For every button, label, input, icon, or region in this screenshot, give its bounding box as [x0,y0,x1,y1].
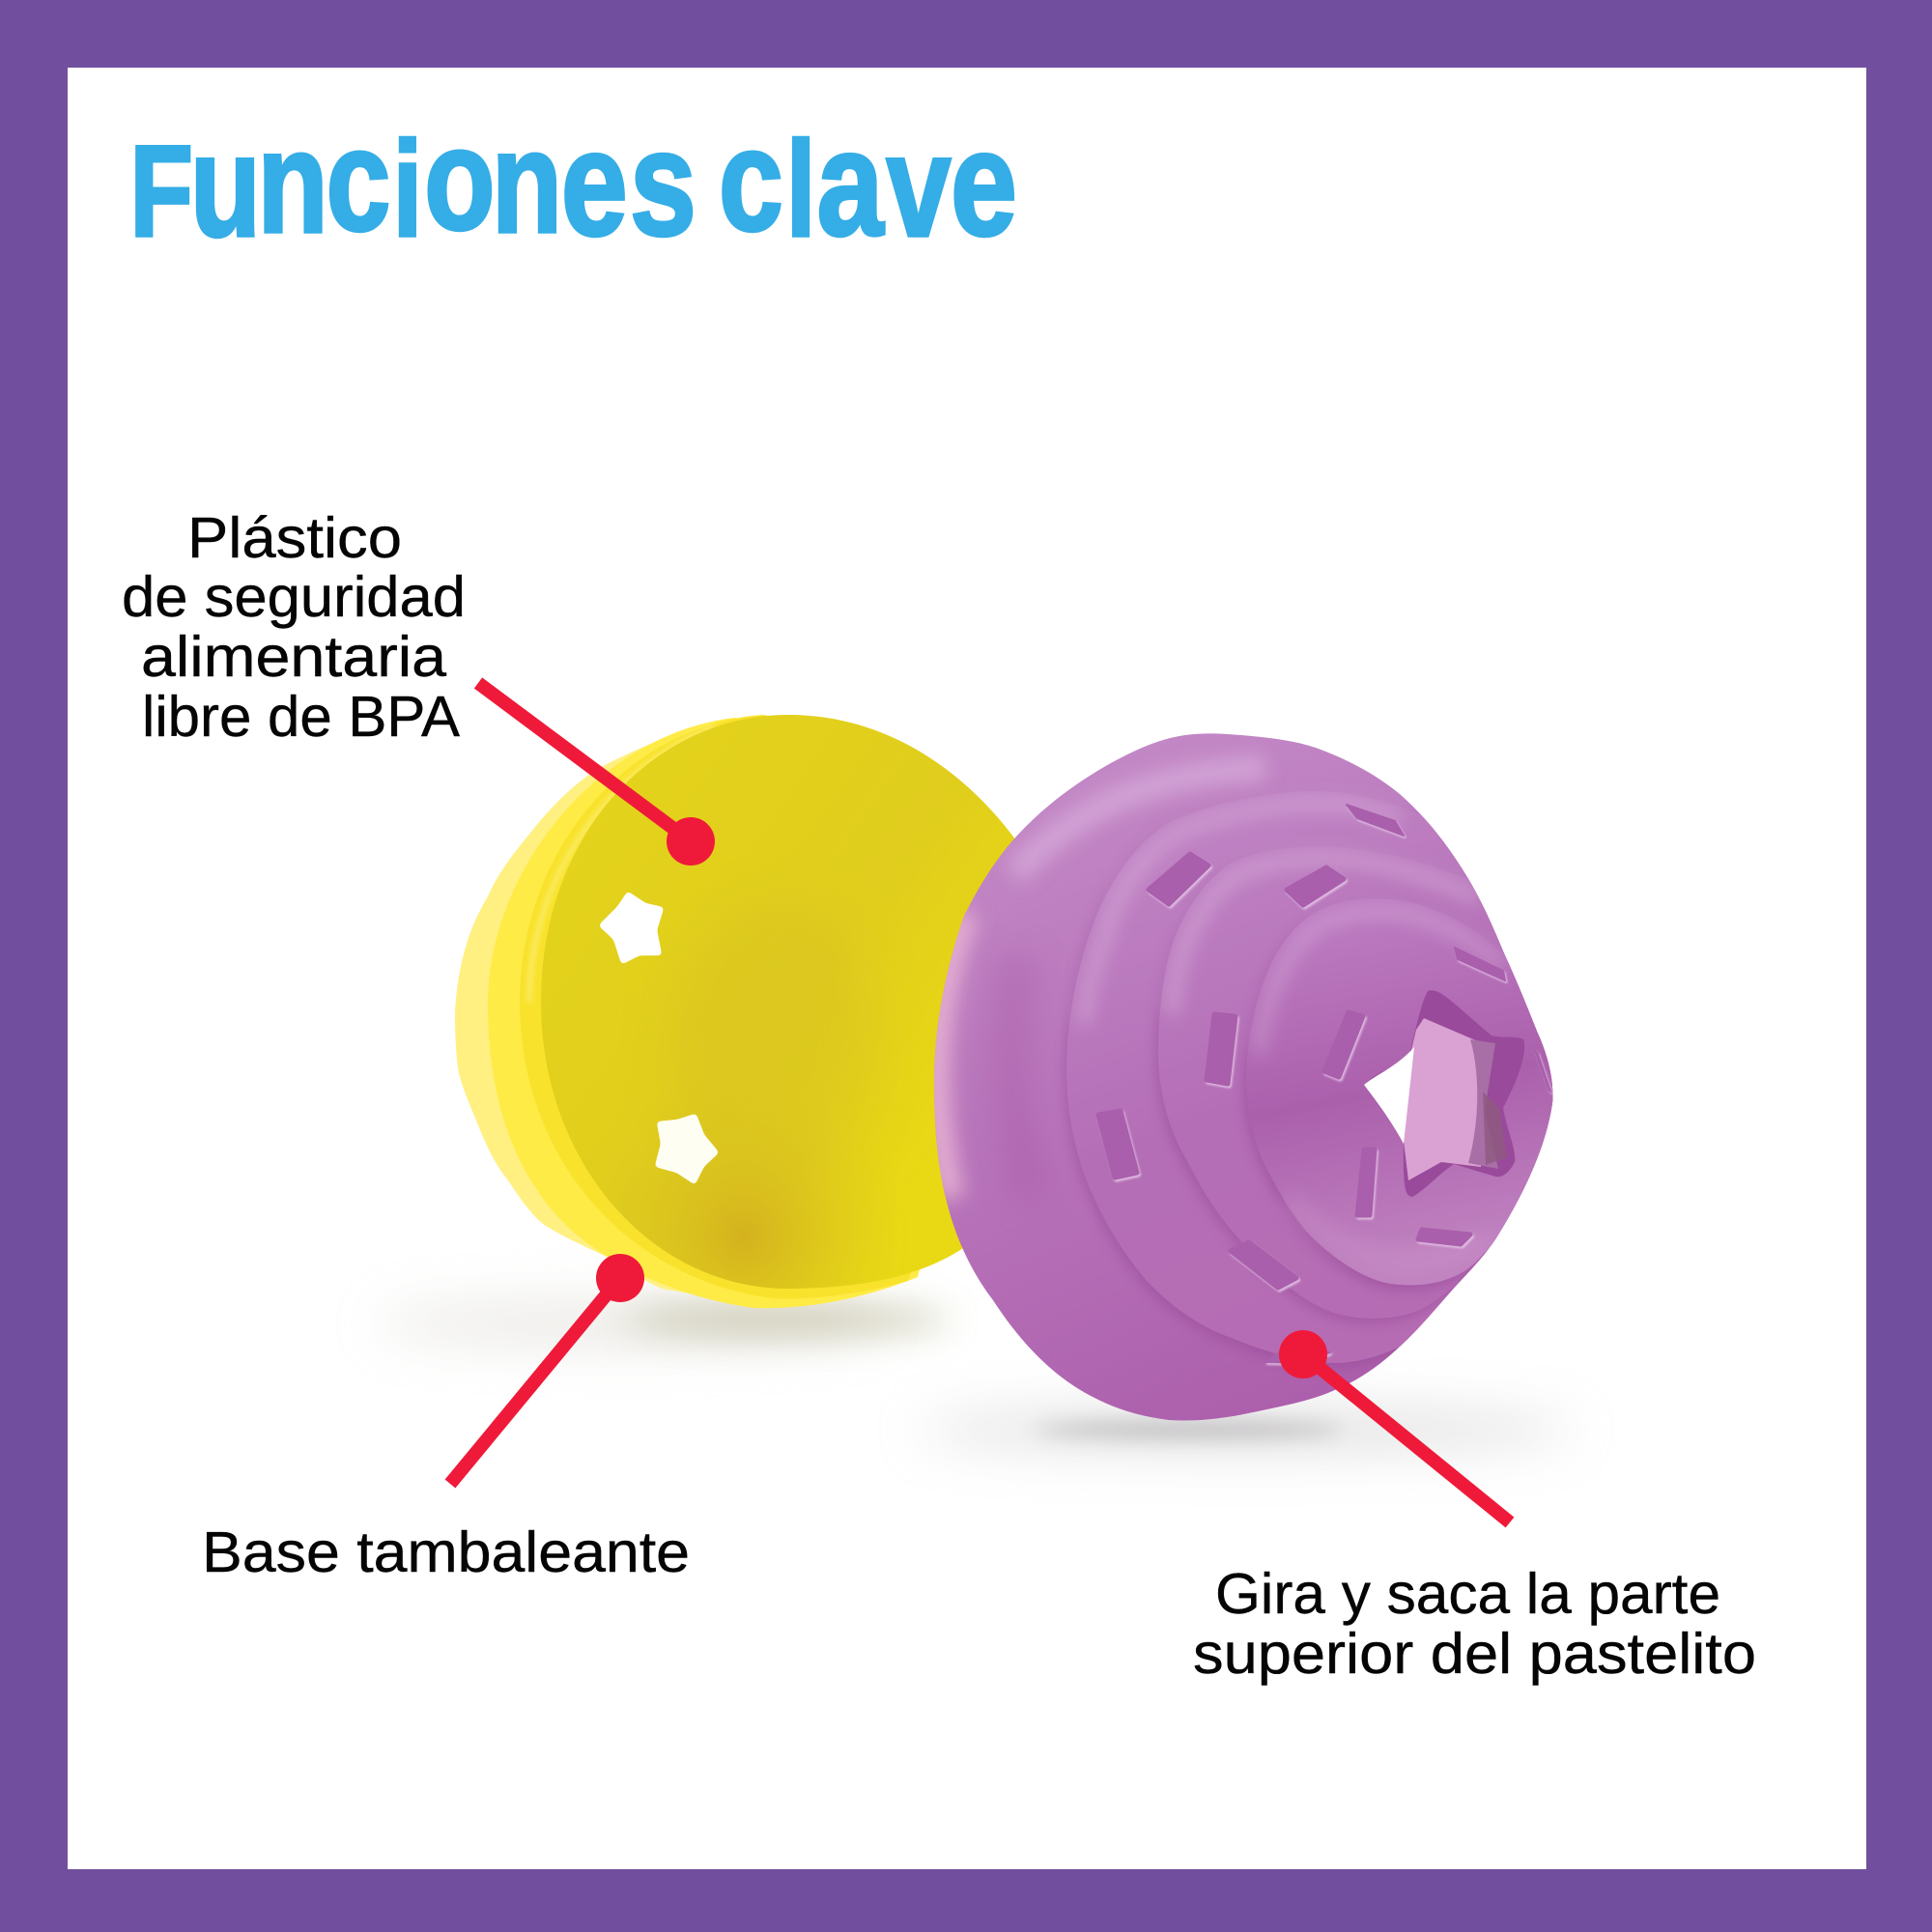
floor shadows [377,1304,1575,1451]
title: c [719,99,783,261]
dark star rim [1364,990,1524,1197]
title: a [817,99,884,267]
label text: superior del pastelito [1193,1622,1756,1686]
disc shading [660,1110,852,1289]
label text: Plástico [187,506,402,570]
icon: star hole bottom [656,1115,718,1183]
pointer dot [596,1254,644,1302]
tier 1 [1064,791,1584,1368]
callout: food-safe plastic [122,506,715,866]
callout: wobbly base [202,1254,690,1584]
title: l [786,113,816,265]
title: e [561,99,628,267]
sprinkles [1098,805,1551,1363]
label text: libre de BPA [142,685,461,749]
label text: alimentaria [141,625,446,689]
pointer line [478,683,691,841]
tier 3 [1243,898,1584,1290]
icon: star hole top [600,893,663,963]
lid disc [541,715,1046,1289]
title: i [392,113,423,265]
title: u [190,104,261,267]
star hole [1364,990,1524,1197]
label text: Base tambaleante [202,1520,690,1584]
purple cupcake top [934,733,1584,1421]
label text: de seguridad [122,565,466,629]
title: v [887,104,951,267]
dome highlights [936,913,966,1198]
pointer dot [1279,1330,1327,1378]
outer scalloped wall [455,720,869,1308]
title: s [630,99,696,267]
pointer dot [667,817,715,866]
inner rim band [520,715,947,1298]
title: F [129,119,193,264]
title: n [257,100,328,263]
see-through white gap [1364,1047,1414,1144]
pointer line [450,1278,620,1484]
title: o [424,98,496,260]
yellow cupcake base [455,715,1046,1308]
rim band [488,718,947,1308]
pointer line [1303,1354,1510,1522]
dome outline [934,733,1552,1421]
inner pink wall [1404,1018,1481,1180]
title: e [951,99,1017,267]
tier 2 [1155,846,1584,1323]
inner far wall [1468,1039,1498,1169]
callout: twist top [1193,1330,1756,1686]
title: c [327,99,390,261]
title: n [492,100,562,263]
label text: Gira y saca la parte [1215,1562,1720,1626]
